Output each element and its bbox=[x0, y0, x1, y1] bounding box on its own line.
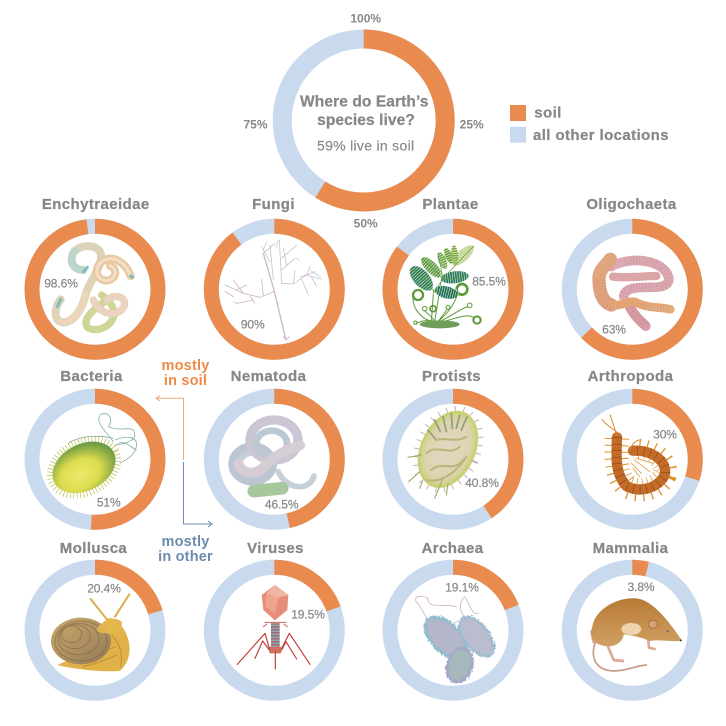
panel: Arthropoda bbox=[569, 368, 695, 522]
value label: 63% bbox=[602, 322, 626, 336]
heading: Fungi bbox=[252, 196, 295, 213]
donut chart: 59% in soil bbox=[282, 39, 445, 202]
annotation: mostly in other: mostly bbox=[162, 534, 209, 550]
value label: 19.1% bbox=[445, 581, 479, 595]
scale labels: 100% bbox=[350, 12, 381, 26]
donut chart bbox=[32, 567, 158, 693]
heading: Protists bbox=[422, 368, 481, 385]
donut chart bbox=[211, 396, 337, 522]
illustration: nematode bbox=[233, 420, 314, 498]
illustration: earthworm bbox=[599, 259, 670, 326]
panel: Plantae bbox=[390, 196, 516, 352]
value label: 90% bbox=[241, 317, 265, 331]
donut chart bbox=[569, 567, 695, 693]
donut chart bbox=[32, 226, 158, 352]
panel: Enchytraeidae bbox=[32, 196, 158, 352]
value label: 85.5% bbox=[472, 275, 506, 289]
arrow: toward other bbox=[184, 462, 212, 527]
value label: 30% bbox=[653, 428, 677, 442]
panel: Fungi bbox=[211, 196, 337, 352]
value label: 51% bbox=[97, 496, 121, 510]
panel: Mammalia bbox=[569, 540, 695, 693]
heading: Mammalia bbox=[593, 540, 669, 557]
annotation: mostly in other bbox=[158, 462, 213, 565]
panel: Archaea bbox=[390, 540, 516, 693]
value label: 98.6% bbox=[44, 277, 78, 291]
illustration: fungal hyphae bbox=[225, 240, 322, 340]
donut chart bbox=[32, 396, 158, 522]
donut chart bbox=[211, 567, 337, 693]
value label: 20.4% bbox=[87, 582, 121, 596]
value label: 19.5% bbox=[291, 607, 325, 621]
legend: soil bbox=[534, 105, 562, 122]
illustration: snail bbox=[51, 594, 130, 671]
illustration: bacteriophage bbox=[237, 585, 310, 669]
heading: Mollusca bbox=[60, 540, 127, 557]
illustration: shrew bbox=[591, 598, 682, 671]
heading: Bacteria bbox=[60, 368, 123, 385]
heading: Nematoda bbox=[231, 368, 307, 385]
legend: all other locations bbox=[533, 127, 669, 144]
illustration: protist bbox=[405, 400, 491, 499]
donut chart bbox=[569, 396, 695, 522]
illustration: centipede bbox=[602, 415, 665, 489]
illustration: pot worm bbox=[56, 246, 133, 330]
heading: Plantae bbox=[422, 196, 479, 213]
value label: 40.8% bbox=[465, 476, 499, 490]
heading: Viruses bbox=[247, 540, 304, 557]
heading: Enchytraeidae bbox=[42, 196, 150, 213]
heading: Arthropoda bbox=[588, 368, 674, 385]
annotation: mostly in soil: mostly bbox=[162, 358, 209, 374]
panel: Protists bbox=[390, 368, 516, 522]
arrow: toward soil bbox=[156, 396, 184, 460]
illustration: bacterium bbox=[42, 413, 137, 505]
scale labels: 75% bbox=[243, 117, 268, 131]
donut chart bbox=[390, 567, 516, 693]
heading: species live? bbox=[317, 112, 415, 129]
panel: Oligochaeta bbox=[569, 196, 695, 352]
annotation: mostly in other: in other bbox=[158, 549, 213, 565]
legend bbox=[510, 105, 669, 144]
donut chart bbox=[569, 226, 695, 352]
value label: 3.8% bbox=[628, 580, 655, 594]
heading: Where do Earth’s bbox=[300, 94, 429, 111]
donut chart bbox=[390, 396, 516, 522]
subheading: 59% live in soil bbox=[317, 138, 414, 154]
illustration: fern bbox=[405, 242, 481, 328]
panel: Bacteria bbox=[32, 368, 158, 522]
panel: main donut bbox=[243, 12, 484, 230]
scale labels: 25% bbox=[460, 117, 484, 131]
annotation: mostly in soil: in soil bbox=[164, 373, 207, 389]
donut chart bbox=[211, 226, 337, 352]
donut chart bbox=[390, 226, 516, 352]
panel: Nematoda bbox=[211, 368, 337, 522]
illustration: archaea bbox=[416, 596, 500, 685]
scale labels: 50% bbox=[354, 216, 378, 230]
heading: Oligochaeta bbox=[586, 196, 677, 213]
value label: 46.5% bbox=[265, 497, 299, 511]
panel: Mollusca bbox=[32, 540, 158, 693]
panel: Viruses bbox=[211, 540, 337, 693]
heading: Archaea bbox=[421, 540, 484, 557]
annotation: mostly in soil bbox=[156, 358, 209, 460]
